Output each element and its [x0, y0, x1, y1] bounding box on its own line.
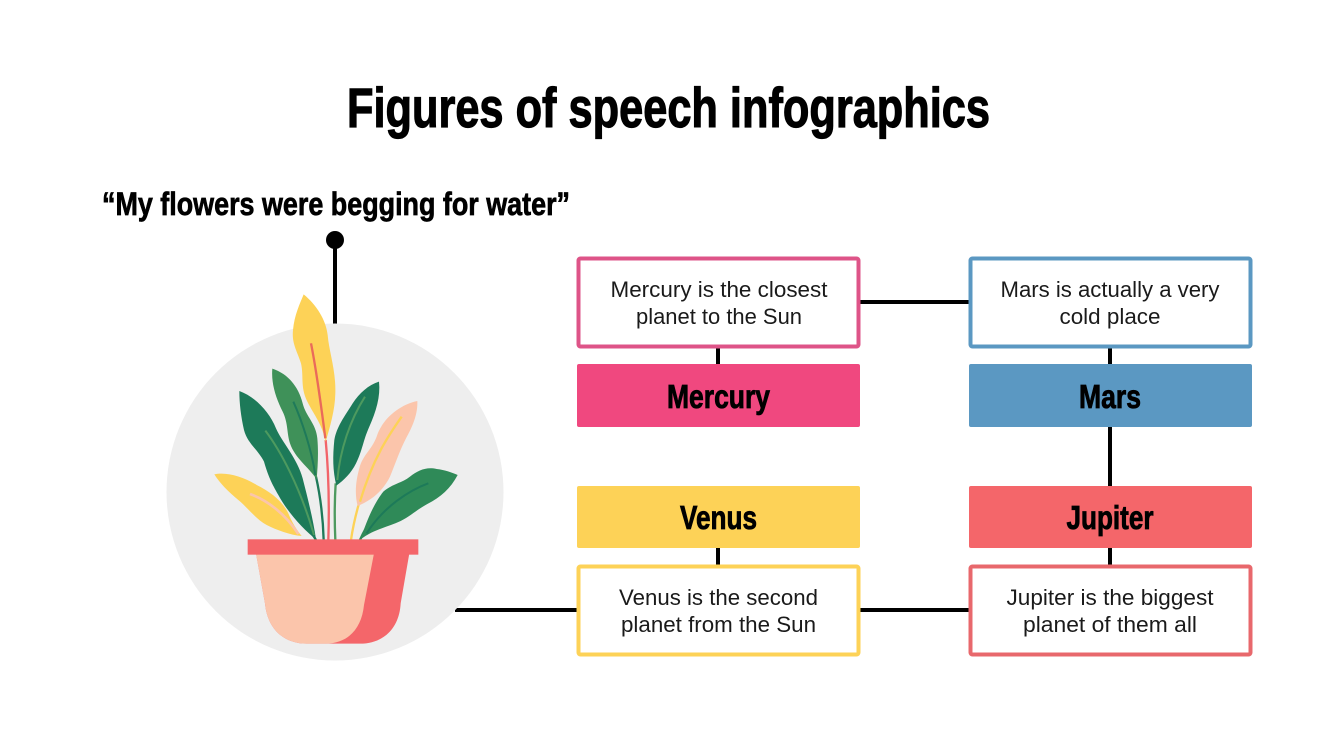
leaf: mid green — [272, 369, 318, 479]
panel: Mars description — [970, 258, 1250, 346]
panel: Jupiter description: Jupiter is the biggest — [1006, 585, 1214, 610]
panel: Mars description: Mars is actually a very — [1000, 277, 1220, 302]
panel: Venus label — [577, 486, 860, 548]
stems — [303, 440, 373, 540]
pot back — [256, 553, 409, 644]
leaf: dark green left — [239, 391, 316, 539]
panel: Mercury label — [577, 364, 860, 427]
icon: potted plant in circle — [166, 294, 504, 660]
leaf: dark green right — [333, 382, 379, 486]
panel: Venus label: Venus — [680, 499, 757, 536]
title: Figures of speech infographics — [347, 76, 990, 139]
pot rim — [248, 539, 418, 555]
icon: connector dot — [326, 231, 344, 249]
leaf: yellow top — [293, 294, 335, 442]
leaf: peach — [356, 401, 417, 506]
quote text: “My flowers were begging for water” — [102, 186, 570, 222]
panel: Mars description: cold place — [1060, 304, 1160, 329]
leaf: yellow left — [214, 474, 302, 536]
leaf: green right low — [361, 468, 458, 539]
panel: Mercury description — [578, 258, 858, 346]
panel: Jupiter label: Jupiter — [1066, 499, 1154, 536]
panel: Mercury description: planet to the Sun — [636, 304, 802, 329]
panel: Venus description: planet from the Sun — [621, 612, 816, 637]
panel: Mercury description: Mercury is the closest — [610, 277, 828, 302]
panel: Venus description — [578, 566, 858, 654]
panel: Jupiter description: planet of them all — [1023, 612, 1197, 637]
panel: Jupiter label — [969, 486, 1252, 548]
pot front — [256, 553, 374, 644]
panel: Jupiter description — [970, 566, 1250, 654]
panel: Mercury label: Mercury — [667, 378, 771, 415]
panel: Venus description: Venus is the second — [619, 585, 818, 610]
panel: Mars label: Mars — [1079, 378, 1141, 415]
connector lines — [335, 240, 1110, 610]
panel: Mars label — [969, 364, 1252, 427]
